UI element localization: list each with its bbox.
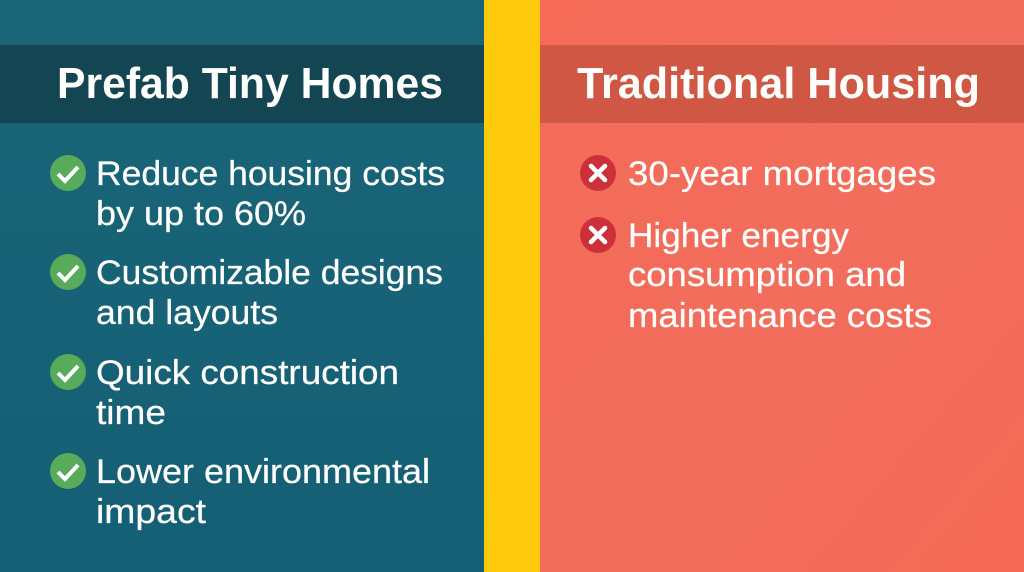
panel: prefab tiny homes xyxy=(0,0,484,572)
panel: traditional housing xyxy=(540,0,1024,572)
benefit: quick construction: time xyxy=(96,394,166,432)
benefit: reduce housing costs xyxy=(50,155,445,233)
heading band: traditional housing xyxy=(540,45,1024,123)
benefit: reduce housing costs: by up to 60% xyxy=(96,195,306,233)
benefit: lower environmental impact xyxy=(50,453,430,531)
benefit: quick construction: Quick construction xyxy=(96,354,399,392)
drawback: 30-year mortgages: 30-year mortgages xyxy=(628,155,936,193)
drawback: higher energy and maintenance costs: Higher energy xyxy=(628,217,850,255)
benefit: lower environmental impact: impact xyxy=(96,493,206,531)
benefit: reduce housing costs: Reduce housing costs xyxy=(96,155,445,193)
heading band: prefab tiny homes: Prefab Tiny Homes xyxy=(57,60,443,108)
benefit: customizable designs xyxy=(50,254,443,332)
drawback: higher energy and maintenance costs xyxy=(580,217,932,335)
drawback: higher energy and maintenance costs: maintenance costs xyxy=(628,297,932,335)
heading band: traditional housing: Traditional Housing xyxy=(577,60,980,108)
benefit: lower environmental impact: Lower environmental xyxy=(96,453,430,491)
benefit: customizable designs: Customizable designs xyxy=(96,254,443,292)
heading band: prefab tiny homes xyxy=(0,45,484,123)
center divider xyxy=(484,0,540,572)
drawback: higher energy and maintenance costs: consumption and xyxy=(628,256,906,294)
benefit: customizable designs: and layouts xyxy=(96,294,278,332)
benefit: quick construction xyxy=(50,354,399,432)
